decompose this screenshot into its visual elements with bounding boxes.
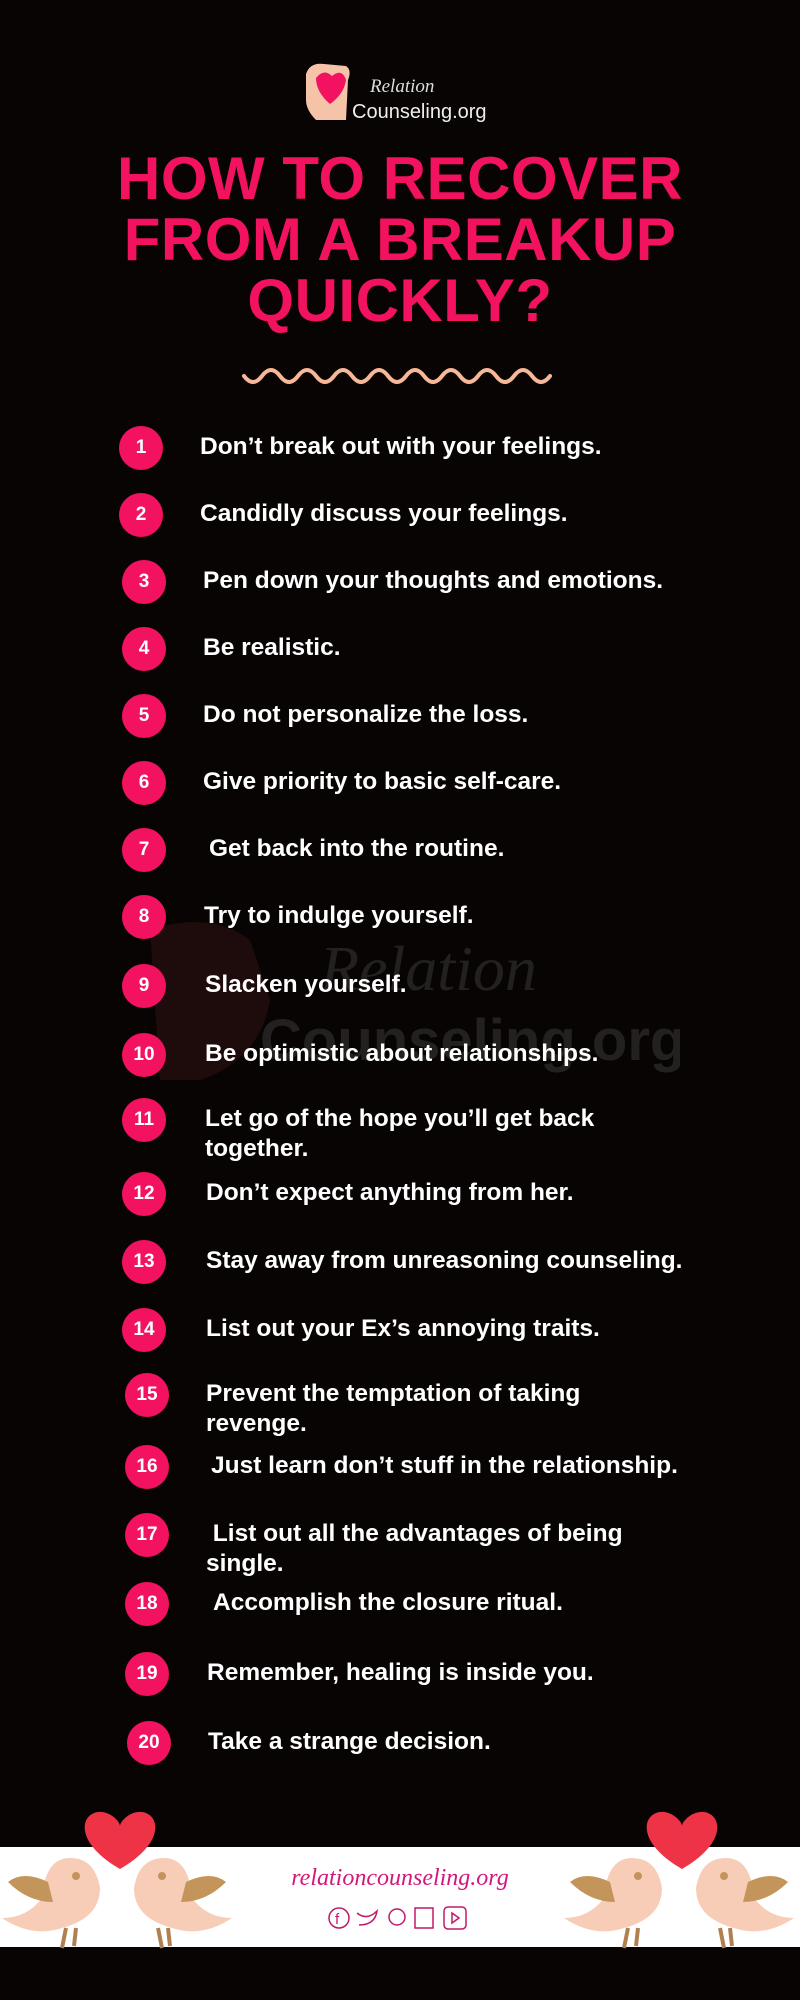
item 4: Be realistic. bbox=[203, 634, 341, 661]
item 1: 1 bbox=[136, 437, 146, 458]
item 1 bbox=[119, 426, 602, 470]
logo: Relation bbox=[369, 76, 434, 97]
item 14 bbox=[122, 1308, 600, 1352]
item 3: 3 bbox=[139, 571, 149, 592]
item 7: Get back into the routine. bbox=[209, 835, 504, 862]
watermark logo: Relation bbox=[319, 933, 537, 1004]
item 5: Do not personalize the loss. bbox=[203, 701, 528, 728]
item 19: Remember, healing is inside you. bbox=[207, 1659, 594, 1686]
list of tips: together. bbox=[205, 1135, 308, 1162]
item 13: Stay away from unreasoning counseling. bbox=[206, 1247, 682, 1274]
item 2: 2 bbox=[136, 504, 146, 525]
item 18 bbox=[125, 1582, 563, 1626]
item 2 bbox=[119, 493, 568, 537]
item 6 bbox=[122, 761, 561, 805]
item 12: Don’t expect anything from her. bbox=[206, 1179, 574, 1206]
item 10 bbox=[122, 1033, 598, 1077]
list of tips: revenge. bbox=[206, 1410, 307, 1437]
item 11: 11 bbox=[134, 1109, 154, 1130]
item 10: 10 bbox=[133, 1044, 155, 1065]
item 18: Accomplish the closure ritual. bbox=[213, 1589, 563, 1616]
item 16: Just learn don’t stuff in the relationship. bbox=[211, 1452, 678, 1479]
logo: Counseling.org bbox=[352, 101, 487, 123]
title bbox=[117, 145, 683, 334]
item 15: Prevent the temptation of taking bbox=[206, 1380, 580, 1407]
item 20 bbox=[127, 1721, 491, 1765]
item 9: Slacken yourself. bbox=[205, 971, 407, 998]
item 14: 14 bbox=[133, 1319, 155, 1340]
item 9 bbox=[122, 964, 407, 1008]
item 8: 8 bbox=[139, 906, 149, 927]
item 6: Give priority to basic self-care. bbox=[203, 768, 561, 795]
item 2: Candidly discuss your feelings. bbox=[200, 500, 568, 527]
item 13: 13 bbox=[133, 1251, 155, 1272]
item 11 bbox=[122, 1098, 594, 1162]
item 12 bbox=[122, 1172, 574, 1216]
birds right bbox=[564, 1812, 794, 1948]
watermark logo bbox=[150, 922, 680, 1080]
item 5: 5 bbox=[139, 705, 149, 726]
item 7: 7 bbox=[139, 839, 149, 860]
item 19: 19 bbox=[136, 1663, 158, 1684]
list of tips bbox=[119, 426, 682, 1765]
title: FROM A BREAKUP bbox=[124, 206, 676, 273]
wave divider bbox=[242, 368, 552, 384]
item 15 bbox=[125, 1373, 580, 1437]
title: QUICKLY? bbox=[247, 267, 553, 334]
title: HOW TO RECOVER bbox=[117, 145, 683, 212]
logo bbox=[306, 64, 487, 123]
icon: fist heart bbox=[306, 64, 350, 120]
item 16: 16 bbox=[136, 1456, 158, 1477]
item 20: 20 bbox=[138, 1732, 160, 1753]
item 20: Take a strange decision. bbox=[208, 1728, 491, 1755]
item 8 bbox=[122, 895, 474, 939]
item 15: 15 bbox=[136, 1384, 158, 1405]
social icons: f bbox=[335, 1911, 340, 1928]
item 18: 18 bbox=[136, 1593, 158, 1614]
item 4: 4 bbox=[139, 638, 149, 659]
list of tips: single. bbox=[206, 1550, 284, 1577]
item 9: 9 bbox=[139, 975, 149, 996]
item 3: Pen down your thoughts and emotions. bbox=[203, 567, 663, 594]
item 19 bbox=[125, 1652, 594, 1696]
item 6: 6 bbox=[139, 772, 149, 793]
item 5 bbox=[122, 694, 528, 738]
item 7 bbox=[122, 828, 504, 872]
item 1: Don’t break out with your feelings. bbox=[200, 433, 602, 460]
item 17: List out all the advantages of being bbox=[213, 1520, 623, 1547]
birds left bbox=[2, 1812, 232, 1948]
item 13 bbox=[122, 1240, 682, 1284]
footer url: relationcounseling.org bbox=[291, 1865, 509, 1891]
watermark logo: Counseling.org bbox=[260, 1008, 680, 1073]
item 17 bbox=[125, 1513, 623, 1577]
item 17: 17 bbox=[136, 1524, 158, 1545]
item 16 bbox=[125, 1445, 678, 1489]
footer band bbox=[0, 1847, 800, 1947]
social icons bbox=[328, 1906, 467, 1930]
item 14: List out your Ex’s annoying traits. bbox=[206, 1315, 600, 1342]
item 10: Be optimistic about relationships. bbox=[205, 1040, 598, 1067]
item 8: Try to indulge yourself. bbox=[204, 902, 474, 929]
item 12: 12 bbox=[133, 1183, 155, 1204]
item 11: Let go of the hope you’ll get back bbox=[205, 1105, 594, 1132]
item 3 bbox=[122, 560, 663, 604]
item 4 bbox=[122, 627, 341, 671]
